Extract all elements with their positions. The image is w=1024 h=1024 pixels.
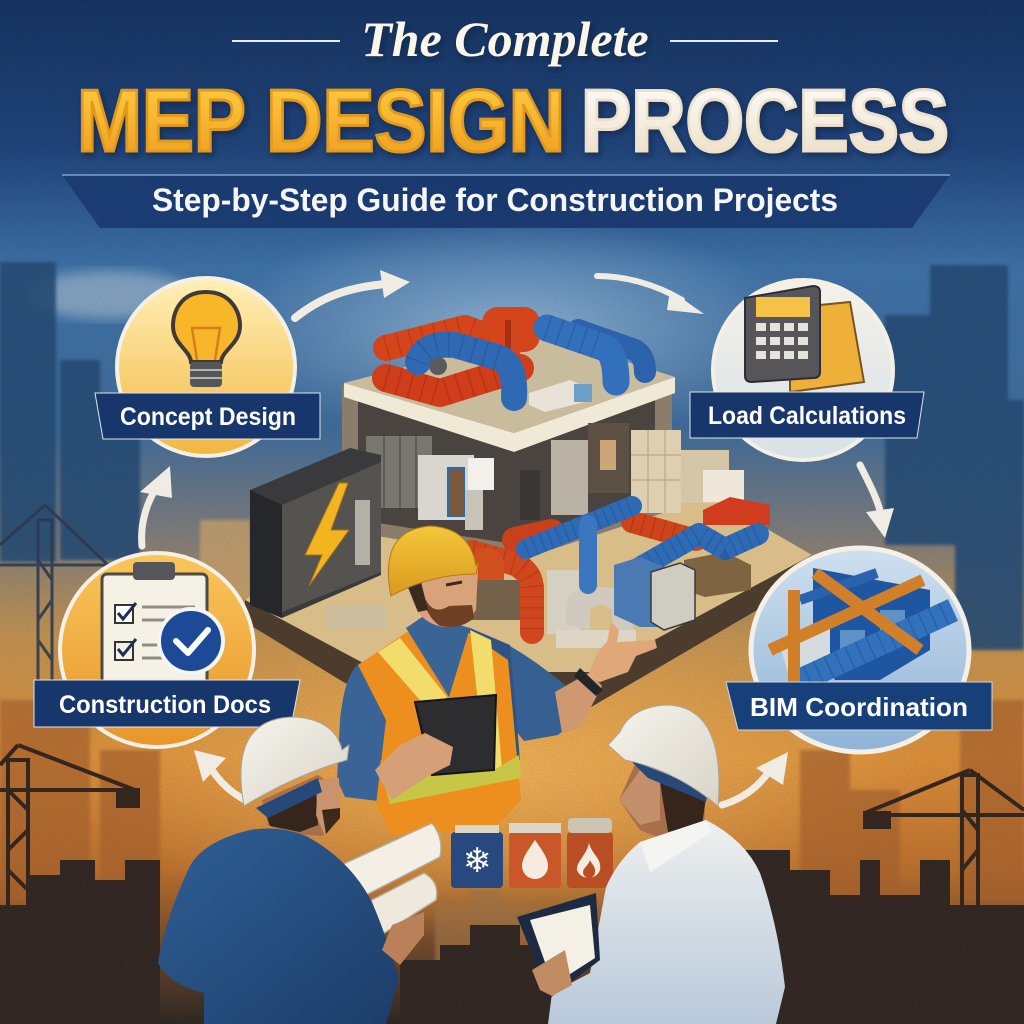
arrow: building to load calculations xyxy=(597,276,704,314)
hand holding rolls xyxy=(382,912,424,965)
crane: left upper xyxy=(0,505,110,680)
person: central engineer with tablet xyxy=(337,526,657,835)
shirt torso xyxy=(360,620,520,760)
icon: clipboard xyxy=(102,562,207,689)
hand xyxy=(532,950,572,996)
distant pale building xyxy=(200,520,250,600)
label: BIM Coordination: BIM Coordination xyxy=(750,692,968,722)
icon: calculator xyxy=(745,286,820,382)
title: The Complete: The Complete xyxy=(361,11,649,67)
safety vest xyxy=(358,628,521,835)
torso xyxy=(158,829,399,1024)
label: Concept Design: Concept Design xyxy=(120,403,296,431)
subtitle ribbon xyxy=(62,175,950,228)
icon: ruler notebook xyxy=(790,302,864,392)
grey cabinet xyxy=(651,563,695,630)
step: Load Calculations xyxy=(690,280,924,460)
subtitle ribbon: Step-by-Step Guide for Construction Projects xyxy=(152,182,838,218)
head and beard xyxy=(407,570,478,627)
blueprint rolls xyxy=(337,823,441,937)
tablet and hand xyxy=(375,695,496,800)
title: MEP Design Process: MEP DESIGN xyxy=(77,71,565,170)
title: MEP Design Process: PROCESS xyxy=(581,71,949,170)
roof boxes xyxy=(529,380,592,412)
icon: BIM model xyxy=(770,568,953,682)
head and neck xyxy=(262,775,340,836)
left arm sleeve xyxy=(337,662,400,803)
roof slab xyxy=(344,333,675,433)
arrow: load calculations to BIM xyxy=(860,465,894,538)
lower red ducts xyxy=(472,522,696,632)
arrow: BIM to team xyxy=(722,752,788,805)
arrow: construction docs to concept xyxy=(140,466,172,546)
right arm with gesturing hand xyxy=(503,622,657,741)
icon: flame xyxy=(567,818,613,888)
white hard hat xyxy=(241,717,349,806)
label: BIM Coordination xyxy=(726,682,992,730)
skyline: blue towers left and right xyxy=(0,262,1024,650)
label: Construction Docs: Construction Docs xyxy=(59,691,271,719)
crane: left lower xyxy=(0,745,138,910)
clipboard xyxy=(517,893,600,998)
arrow: concept to central building xyxy=(295,270,410,318)
icon: light bulb xyxy=(173,292,240,387)
equipment cabinets xyxy=(366,423,744,530)
white hard hat xyxy=(608,705,719,806)
lower blue ducts xyxy=(526,506,758,627)
step: Construction Docs xyxy=(34,553,300,747)
icon: water drop xyxy=(509,823,561,888)
icon: snowflake xyxy=(451,825,503,888)
label: Load Calculations xyxy=(690,392,924,438)
step: BIM Coordination xyxy=(726,548,992,752)
person: left engineer with blueprints xyxy=(158,717,424,1024)
icon: lightning bolt xyxy=(305,483,349,586)
torso xyxy=(548,820,785,1024)
head and neck xyxy=(619,762,706,838)
blue hat liner xyxy=(256,778,322,818)
electrical panel xyxy=(250,448,381,618)
icon: snowflake: ❄ xyxy=(463,841,491,881)
step: Concept Design xyxy=(95,278,320,456)
lower equipment xyxy=(325,497,770,648)
label: Construction Docs xyxy=(34,680,300,727)
red roof ducts xyxy=(386,307,540,393)
icon: check badge xyxy=(159,609,223,673)
ground slab xyxy=(245,490,812,672)
yellow hard hat xyxy=(388,526,479,596)
blue roof ducts xyxy=(418,328,645,398)
title: MEP Design Process xyxy=(77,71,949,170)
icons: HVAC, water, fire canisters xyxy=(451,818,613,888)
skyline: lower orange silhouettes xyxy=(0,700,1024,1024)
arrow: team to construction docs xyxy=(194,750,245,800)
shirt collar xyxy=(406,615,470,697)
person: right engineer with clipboard xyxy=(517,705,785,1024)
crane: right lower xyxy=(865,770,1024,905)
building model: central MEP cutaway xyxy=(245,307,812,710)
label: Concept Design xyxy=(95,393,320,439)
building walls xyxy=(342,385,672,560)
label: Load Calculations: Load Calculations xyxy=(708,402,906,430)
skyline: dark foreground silhouettes xyxy=(0,850,1024,1024)
